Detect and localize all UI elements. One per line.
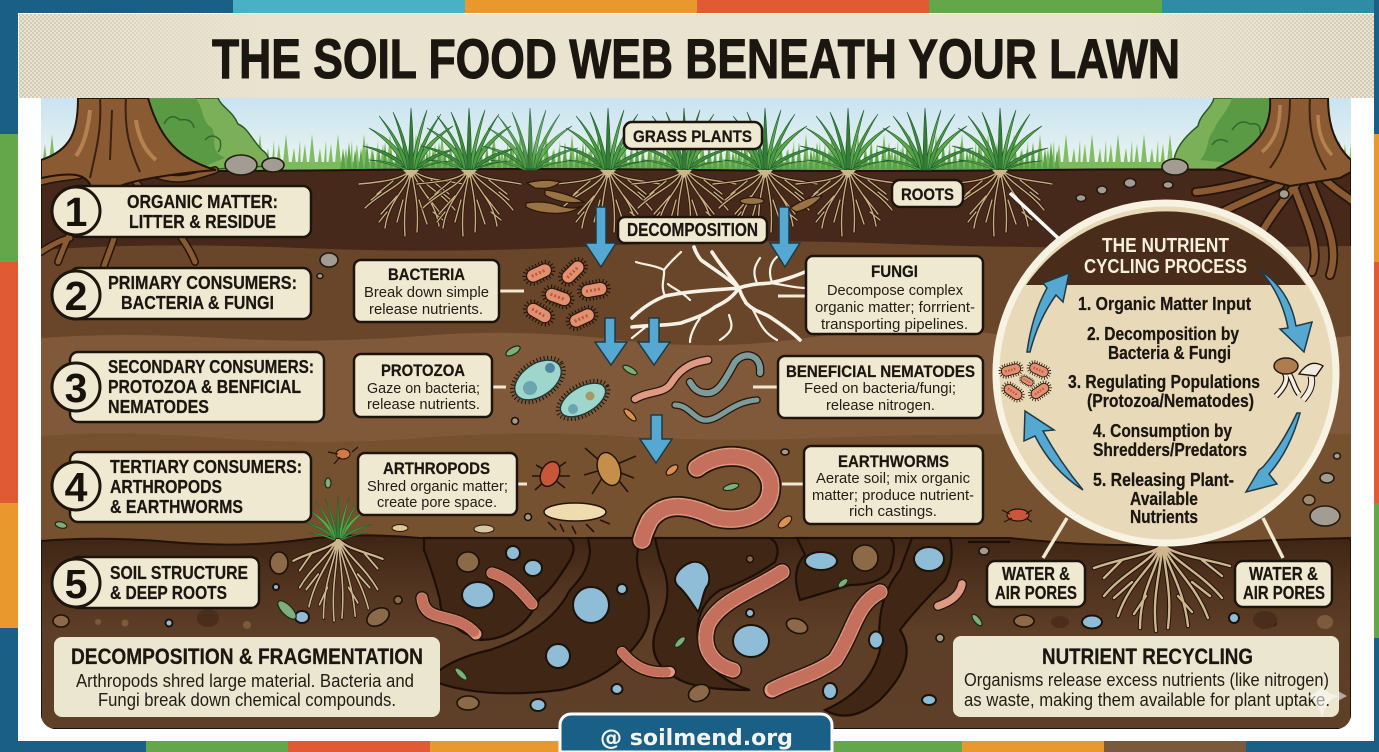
background grass [43, 134, 1351, 170]
arthropods illustration [328, 447, 1032, 534]
label: roots: ROOTS [901, 185, 954, 204]
panel: nutrient recycling: Organisms release excess nutrients (like nitrogen) [964, 670, 1329, 690]
callout: bacteria: BACTERIA [388, 265, 465, 284]
level 4: tertiary consumers: & EARTHWORMS [110, 497, 243, 517]
panel: nutrient recycling [953, 636, 1339, 717]
panel: decomposition and fragmentation: Fungi break down chemical compounds. [98, 690, 396, 710]
grass roots [359, 170, 1052, 236]
right bush [1174, 98, 1272, 172]
level 4: tertiary consumers: ARTHROPODS [110, 477, 222, 497]
scene: soil cross-section [41, 98, 1351, 729]
callout: fungi: organic matter; forrrient- [815, 299, 975, 316]
panel: nutrient recycling: as waste, making them available for plant uptake. [964, 690, 1330, 710]
level 3: secondary consumers: PROTOZOA & BENFICIAL [108, 377, 301, 397]
callout: beneficial nematodes: release nitrogen. [826, 397, 935, 414]
cycle steps: Nutrients [1130, 507, 1198, 527]
bacteria illustration [522, 256, 610, 332]
circle header band [1026, 211, 1306, 285]
callout: water and air pores right: WATER & [1249, 564, 1318, 584]
callout: earthworms: rich castings. [849, 503, 937, 520]
level 4: tertiary consumers [52, 452, 311, 522]
circle heading: THE NUTRIENT [1102, 235, 1229, 257]
callout: protozoa: Gaze on bacteria; [367, 380, 480, 397]
cycle steps: (Protozoa/Nematodes) [1087, 391, 1254, 411]
callout: earthworms: matter; produce nutrient- [812, 487, 974, 504]
sky [41, 98, 1351, 162]
small plant with deep roots [293, 495, 383, 621]
level 2: primary consumers: BACTERIA & FUNGI [121, 293, 274, 313]
callout: fungi: FUNGI [871, 262, 918, 281]
level 5: soil structure [52, 557, 259, 608]
burrow network [424, 538, 1010, 716]
water pores [166, 546, 1239, 711]
callout: bacteria [354, 260, 499, 322]
green and orange particles [54, 344, 984, 682]
level 1: organic matter [52, 186, 311, 237]
panel: decomposition and fragmentation: DECOMPOSITION & FRAGMENTATION [71, 644, 423, 669]
callout: earthworms: Aerate soil; mix organic [816, 470, 970, 487]
level 3: secondary consumers: NEMATODES [108, 397, 209, 417]
level 2: primary consumers: PRIMARY CONSUMERS: [108, 273, 297, 293]
callout: arthropods: ARTHROPODS [383, 459, 490, 478]
label: decomposition: DECOMPOSITION [627, 220, 758, 240]
callout: bacteria: release nutrients. [369, 301, 483, 318]
panel: nutrient cycling process [996, 203, 1336, 543]
callout: protozoa: release nutrients. [367, 396, 480, 413]
circle heading: CYCLING PROCESS [1084, 256, 1247, 278]
callout: arthropods [358, 453, 517, 515]
footer tab: @ soilmend.org [600, 725, 793, 751]
right tree with roots [1196, 98, 1351, 275]
panel: decomposition and fragmentation: Arthropods shred large material. Bacteria and [76, 671, 414, 691]
callout: bacteria: Break down simple [364, 284, 489, 301]
big earthworm [622, 456, 771, 672]
burrow worms [422, 572, 962, 690]
nematodes illustration [635, 355, 760, 420]
cycle steps: Available [1130, 489, 1198, 509]
surface stones [225, 155, 1340, 526]
soil layers [41, 169, 1351, 729]
large deep root system [1094, 546, 1230, 631]
level 5: soil structure: 5 [65, 561, 87, 607]
level 5: soil structure: & DEEP ROOTS [110, 583, 227, 603]
cycle arrows [1024, 270, 1312, 492]
callout: water and air pores left [987, 561, 1085, 607]
callout: arthropods: create pore space. [377, 494, 497, 511]
callout: earthworms [804, 446, 983, 524]
panel: nutrient recycling: NUTRIENT RECYCLING [1042, 644, 1253, 669]
cycle steps: 4. Consumption by [1093, 421, 1232, 441]
callout: earthworms: EARTHWORMS [838, 452, 949, 471]
cycle steps: 2. Decomposition by [1087, 324, 1239, 344]
level 1: organic matter: LITTER & RESIDUE [129, 212, 276, 232]
title band [19, 14, 1374, 98]
cycle steps: Bacteria & Fungi [1108, 343, 1231, 363]
level 5: soil structure: SOIL STRUCTURE [110, 563, 248, 583]
callout: fungi: Decompose complex [827, 282, 963, 299]
panel: decomposition and fragmentation [54, 637, 440, 717]
left tree with roots [41, 98, 216, 266]
label: grass plants [624, 122, 762, 149]
level 3: secondary consumers: SECONDARY CONSUMERS: [108, 357, 314, 377]
decomposition arrows [585, 207, 800, 463]
level 4: tertiary consumers: TERTIARY CONSUMERS: [110, 457, 302, 477]
cycle steps: 5. Releasing Plant- [1093, 470, 1234, 490]
cycle steps [1068, 294, 1260, 527]
label: decomposition [618, 217, 767, 243]
cycle steps: 1. Organic Matter Input [1078, 294, 1251, 314]
level 2: primary consumers: 2 [65, 273, 87, 319]
level 4: tertiary consumers: 4 [65, 464, 88, 510]
connector lines [492, 193, 1283, 558]
level 3: secondary consumers [52, 352, 324, 422]
protozoa illustration [510, 356, 610, 422]
callout: arthropods: Shred organic matter; [367, 478, 508, 495]
icon: sparkle watermark [1305, 685, 1347, 718]
soil pebbles [53, 418, 1333, 710]
callout: water and air pores right [1235, 561, 1332, 607]
callout: water and air pores left: WATER & [1002, 564, 1070, 584]
leaf litter [526, 180, 822, 213]
cycle steps: 3. Regulating Populations [1068, 372, 1260, 392]
callout: beneficial nematodes: BENEFICIAL NEMATODES [786, 362, 975, 381]
grass plants [363, 108, 1048, 170]
callout: water and air pores left: AIR PORES [995, 583, 1077, 603]
fungi hyphae [632, 247, 805, 342]
callout: fungi [806, 256, 983, 334]
icon: bacteria cluster [999, 360, 1053, 403]
callout: protozoa: PROTOZOA [381, 361, 465, 380]
label: roots [892, 180, 963, 207]
icon: mushrooms [1274, 358, 1323, 400]
label: grass plants: GRASS PLANTS [633, 127, 752, 146]
level 3: secondary consumers: 3 [65, 365, 87, 411]
level 1: organic matter: ORGANIC MATTER: [127, 192, 278, 212]
callout: protozoa [354, 354, 492, 417]
level 2: primary consumers [52, 268, 311, 319]
cycle steps: Shredders/Predators [1093, 440, 1247, 460]
left bush [146, 98, 269, 170]
callout: beneficial nematodes: Feed on bacteria/fungi; [804, 380, 956, 397]
callout: fungi: transporting pipelines. [821, 316, 968, 333]
level 1: organic matter: 1 [65, 189, 87, 235]
footer tab [560, 714, 832, 752]
callout: water and air pores right: AIR PORES [1243, 583, 1325, 603]
callout: beneficial nematodes [778, 356, 983, 418]
circle heading [1084, 235, 1247, 278]
